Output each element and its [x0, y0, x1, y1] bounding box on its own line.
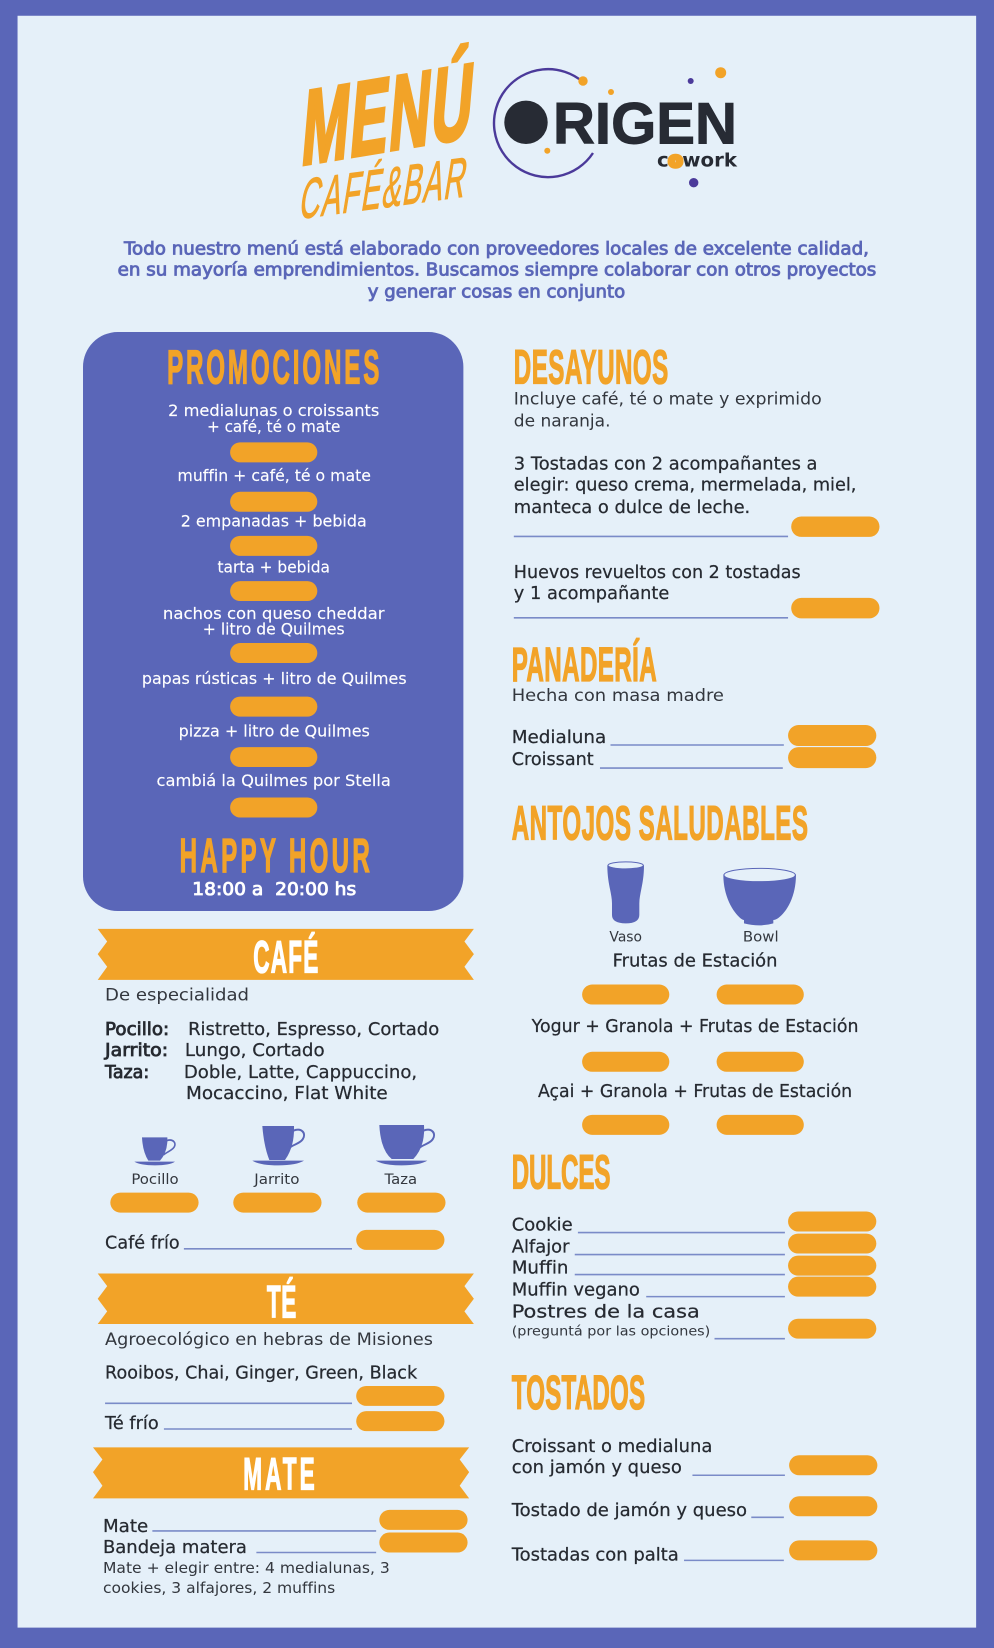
panel: promociones [83, 332, 463, 911]
item: postres [512, 1302, 876, 1340]
item: té varieties [105, 1364, 444, 1406]
item: té varieties: Rooibos, Chai, Ginger, Green, Black [105, 1364, 417, 1384]
café sizes list: Ristretto, Espresso, Cortado [188, 1020, 439, 1040]
item: huevos [514, 563, 879, 618]
subtitle: Café & Bar: CAFÉ&BAR [296, 145, 472, 231]
promo: papas [142, 670, 407, 717]
cup sizes with price pills: Taza [384, 1172, 417, 1188]
item: muffin vegano [512, 1277, 876, 1301]
café sizes list [104, 1020, 439, 1104]
item: tostadas con palta: Tostadas con palta [511, 1545, 679, 1565]
item: tostadas [514, 455, 879, 537]
item: tostadas: manteca o dulce de leche. [514, 498, 750, 518]
promo: stella [157, 772, 391, 817]
logo: Origen Cowork [494, 67, 737, 187]
section: dulces [512, 1145, 876, 1340]
promo: medialunas: + café, té o mate [207, 418, 340, 436]
item: croissant jamón y queso: Croissant o medialuna [512, 1437, 712, 1457]
icon: pocillo cup [134, 1137, 175, 1165]
section: tostados [511, 1366, 877, 1565]
promo: empanadas [181, 512, 367, 556]
item: medialuna [512, 725, 876, 748]
ribbon: café: CAFÉ [253, 932, 318, 983]
item: tostadas: elegir: queso crema, mermelada, miel, [514, 476, 856, 496]
item: tostado jamón y queso: Tostado de jamón y queso [511, 1501, 747, 1521]
intro text [118, 239, 876, 302]
ribbon: café [98, 929, 474, 983]
promo: tarta [218, 559, 330, 601]
heading: promociones: PROMOCIONES [167, 341, 379, 395]
item: tostadas con palta [511, 1540, 877, 1565]
promo: stella: cambiá la Quilmes por Stella [157, 772, 391, 790]
item: postres: (preguntá por las opciones) [512, 1325, 710, 1340]
ribbon: té: TÉ [267, 1277, 296, 1328]
promo: nachos: nachos con queso cheddar [163, 605, 385, 623]
promo: medialunas [168, 402, 379, 462]
promo: pizza: pizza + litro de Quilmes [179, 723, 370, 741]
item: cookie: Cookie [512, 1215, 573, 1235]
item: frutas [582, 952, 804, 1005]
cup sizes with price pills: Pocillo [131, 1172, 179, 1188]
promo: papas: papas rústicas + litro de Quilmes [142, 670, 407, 688]
section: café [98, 929, 474, 1253]
desayunos description [514, 389, 822, 431]
ribbon: mate: MATE [243, 1449, 315, 1500]
promo: muffin [178, 467, 371, 512]
item: mate [103, 1510, 468, 1537]
icon: jarrito cup [252, 1126, 304, 1165]
item: alfajor [512, 1234, 876, 1257]
item: tostado jamón y queso [511, 1496, 877, 1521]
promo: empanadas: 2 empanadas + bebida [181, 512, 367, 530]
bandeja description: cookies, 3 alfajores, 2 muffins [103, 1579, 335, 1597]
ribbon: té [98, 1274, 474, 1328]
section: antojos saludables [512, 797, 858, 1135]
item: café frío [105, 1230, 444, 1253]
item: café frío: Café frío [105, 1233, 180, 1253]
icon: vaso [607, 862, 644, 923]
item: bandeja matera [103, 1533, 468, 1558]
café sizes list: Lungo, Cortado [185, 1041, 325, 1061]
café sizes list: Jarrito: [104, 1041, 168, 1061]
promo: muffin: muffin + café, té o mate [178, 467, 371, 485]
item: tostadas: 3 Tostadas con 2 acompañantes a [514, 455, 817, 475]
item: té frío: Té frío [104, 1414, 159, 1434]
item: alfajor: Alfajor [512, 1237, 570, 1257]
promo: nachos [163, 605, 385, 663]
heading: tostados: TOSTADOS [512, 1366, 645, 1420]
item: medialuna: Medialuna [512, 728, 606, 748]
item: croissant jamón y queso: con jamón y queso [512, 1458, 682, 1478]
item: croissant: Croissant [512, 750, 594, 770]
promo: tarta: tarta + bebida [218, 559, 330, 577]
café sizes list: Taza: [104, 1063, 149, 1083]
vessel labels [609, 929, 779, 945]
café sizes list: Pocillo: [105, 1020, 169, 1040]
item: huevos: Huevos revueltos con 2 tostadas [514, 563, 801, 583]
promo: pizza [179, 723, 370, 767]
logo: Origen Cowork: cowork [657, 150, 737, 172]
heading: happy hour: HAPPY HOUR [180, 829, 370, 884]
té description: Agroecológico en hebras de Misiones [105, 1329, 433, 1349]
panadería description: Hecha con masa madre [512, 685, 724, 705]
café sizes list: Doble, Latte, Cappuccino, [184, 1063, 417, 1083]
heading: antojos saludables: ANTOJOS SALUDABLES [512, 797, 808, 851]
item: huevos: y 1 acompañante [514, 584, 669, 604]
ribbon: mate [93, 1447, 469, 1500]
intro text: Todo nuestro menú está elaborado con proveedores locales de excelente calidad, [123, 239, 869, 259]
vessel labels: Bowl [743, 929, 779, 945]
section: té [98, 1274, 474, 1434]
item: açai [538, 1082, 852, 1135]
item: yogur [531, 1017, 858, 1072]
heading: desayunos: DESAYUNOS [514, 341, 668, 395]
icon: bowl [723, 868, 796, 925]
item: muffin: Muffin [512, 1259, 568, 1279]
section: desayunos [514, 341, 879, 618]
item: açai: Açai + Granola + Frutas de Estación [538, 1082, 852, 1102]
café description: De especialidad [105, 984, 249, 1004]
item: croissant [512, 747, 876, 770]
item: bandeja matera: Bandeja matera [103, 1538, 247, 1558]
item: té frío [104, 1411, 444, 1434]
cup sizes with price pills: Jarrito [253, 1172, 299, 1188]
desayunos description: de naranja. [514, 411, 610, 431]
item: cookie [512, 1212, 876, 1235]
item: muffin [512, 1256, 876, 1279]
promo: medialunas: 2 medialunas o croissants [168, 402, 379, 420]
vessel labels: Vaso [609, 929, 642, 945]
item: muffin vegano: Muffin vegano [512, 1281, 640, 1301]
header [296, 41, 737, 231]
section: panadería [512, 637, 876, 770]
heading: dulces: DULCES [512, 1145, 610, 1200]
bandeja description: Mate + elegir entre: 4 medialunas, 3 [103, 1559, 390, 1577]
icon: taza cup [376, 1125, 434, 1165]
intro text: en su mayoría emprendimientos. Buscamos siempre colaborar con otros proyectos [118, 260, 876, 280]
item: yogur: Yogur + Granola + Frutas de Estación [531, 1017, 858, 1037]
heading: panadería: PANADERÍA [512, 637, 657, 692]
happy hour time: 18:00 a 20:00 hs [192, 880, 356, 900]
section: mate [93, 1447, 469, 1597]
item: mate: Mate [103, 1517, 148, 1537]
item: postres: Postres de la casa [512, 1302, 700, 1323]
logo: Origen Cowork: RIGEN [553, 92, 737, 157]
title: Menú: MENÚ [298, 41, 478, 189]
desayunos description: Incluye café, té o mate y exprimido [514, 389, 822, 409]
item: frutas: Frutas de Estación [613, 952, 778, 972]
promo: nachos: + litro de Quilmes [203, 621, 345, 639]
café sizes list: Mocaccino, Flat White [186, 1084, 388, 1104]
intro text: y generar cosas en conjunto [368, 282, 625, 302]
cup sizes with price pills [110, 1172, 446, 1213]
item: croissant jamón y queso [512, 1437, 877, 1478]
bandeja description [103, 1559, 390, 1597]
